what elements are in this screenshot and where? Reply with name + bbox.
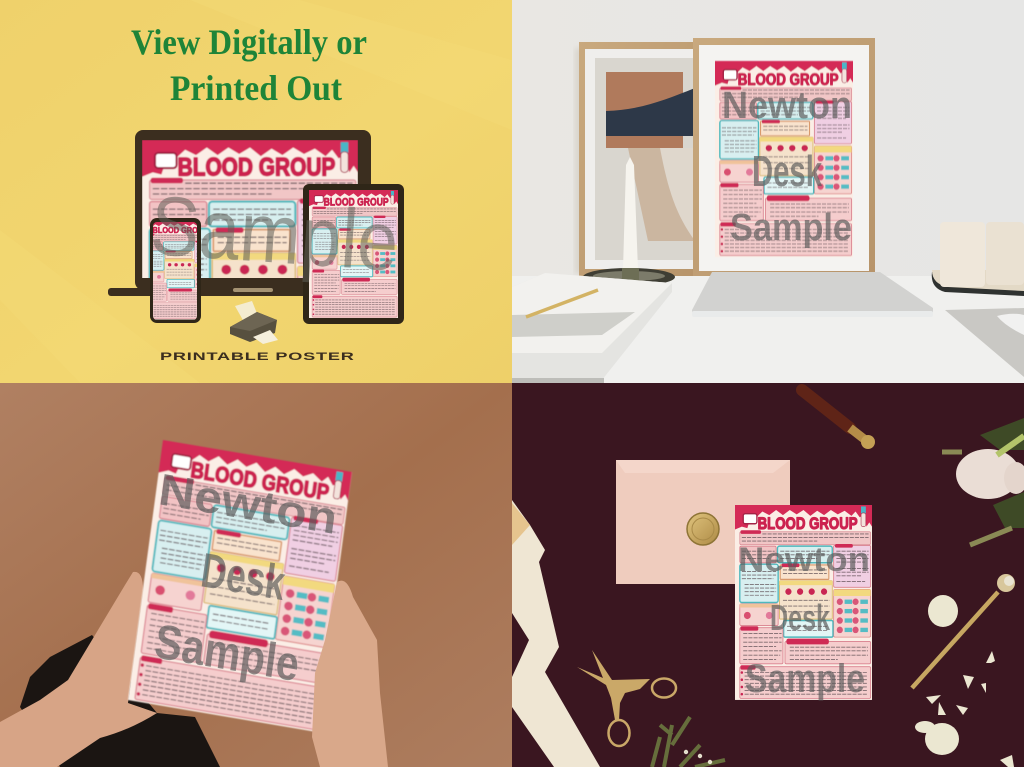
icon: printer [230,301,278,344]
sprig [652,717,725,767]
watermark: sample on devices: Sample [148,178,401,289]
candle on holder [583,157,675,286]
front frame with poster [693,38,875,276]
left hand [0,572,157,767]
front frame with poster: BLOOD GROUP [738,71,839,89]
panel: yellow device mockup [0,0,512,383]
watermark: newton desk sample: Desk [198,543,288,611]
watermark: newton desk sample: Newton [722,85,852,127]
panel: hands holding poster [0,383,512,767]
watermark: newton desk sample: Sample [745,657,865,701]
scissors [577,650,676,746]
watermark: newton desk sample [135,465,340,695]
pillar candles on tray [932,222,1024,296]
ribbon [512,500,600,767]
icon: laptop showing poster: BLOOD GROUP [178,155,335,182]
panel: framed poster on desk [512,0,1024,383]
icon: phone showing poster [150,218,201,323]
icon: tablet showing poster: BLOOD GROUP [324,196,389,209]
closed laptop [692,272,933,317]
flat poster [735,505,872,701]
icon: tablet showing poster [303,184,404,324]
heading: view digitally or printed out [131,22,367,108]
handheld poster [128,440,352,732]
watermark: newton desk sample: Sample [730,207,852,249]
watermark: newton desk sample [738,541,870,701]
heading: view digitally or printed out: View Digitally or [131,22,367,62]
wax stamp [802,390,875,449]
watermark: newton desk sample: Desk [770,597,831,638]
flowers [942,418,1024,545]
label: printable poster: PRINTABLE POSTER [160,350,354,363]
watermark: newton desk sample [722,85,852,249]
handheld poster: BLOOD GROUP [189,457,331,505]
heading: view digitally or printed out: Printed Out [170,68,342,108]
watermark: newton desk sample: Desk [752,147,822,196]
icon: laptop showing poster [108,130,371,296]
envelope and wax seal [616,460,790,584]
watermark: newton desk sample: Sample [152,614,302,692]
mouse pad [945,308,1024,377]
watermark: newton desk sample: Newton [156,465,340,544]
panel: stationery flat lay [512,383,1024,767]
notebook and pen [512,273,672,383]
gold pen [912,574,1015,688]
petals [915,595,1014,767]
dark clothing [20,635,220,767]
back frame with abstract art [575,42,697,276]
watermark: newton desk sample: Newton [738,541,870,579]
right hand [312,581,388,767]
flat poster: BLOOD GROUP [758,514,858,533]
icon: phone showing poster: BLOOD GROUP [153,225,208,235]
